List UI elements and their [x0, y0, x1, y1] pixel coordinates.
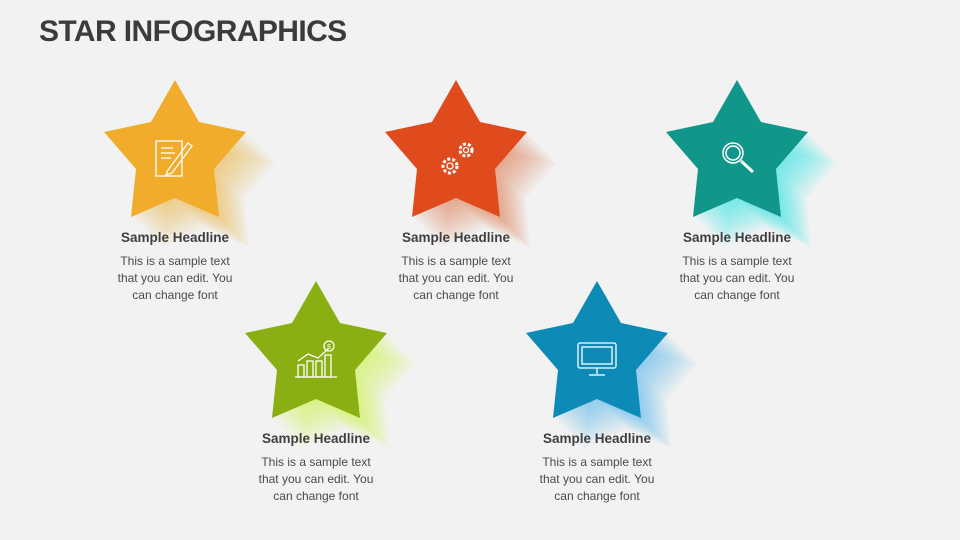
text block 1: [118, 230, 232, 302]
text block 2: This is a sample text: [401, 254, 511, 268]
text block 2: [398, 230, 513, 302]
text block 1: This is a sample text: [120, 254, 230, 268]
text block 2: can change font: [413, 288, 499, 302]
star 1: orange, document icon: [104, 80, 276, 247]
text block 4: Sample Headline: [262, 431, 370, 446]
star 5: blue, monitor icon: [526, 281, 698, 448]
text block 5: Sample Headline: [543, 431, 651, 446]
text block 1: can change font: [132, 288, 218, 302]
text block 3: [680, 230, 794, 302]
text block 1: Sample Headline: [121, 230, 229, 245]
text block 5: This is a sample text: [542, 455, 652, 469]
text block 4: can change font: [273, 489, 359, 503]
text block 2: that you can edit. You: [399, 271, 513, 285]
star 4: green, chart icon: [245, 281, 417, 448]
title: STAR INFOGRAPHICS: [39, 15, 347, 48]
text block 3: that you can edit. You: [680, 271, 794, 285]
text block 4: This is a sample text: [261, 455, 371, 469]
text block 3: Sample Headline: [683, 230, 791, 245]
text block 5: [540, 431, 654, 503]
text block 3: This is a sample text: [682, 254, 792, 268]
star 3: teal, magnifier icon: [666, 80, 838, 247]
text block 5: can change font: [554, 489, 640, 503]
text block 4: that you can edit. You: [259, 472, 373, 486]
text block 3: can change font: [694, 288, 780, 302]
text block 1: that you can edit. You: [118, 271, 232, 285]
star 4: green, chart icon: $: [327, 344, 331, 351]
text block 2: Sample Headline: [402, 230, 510, 245]
text block 5: that you can edit. You: [540, 472, 654, 486]
text block 4: [258, 431, 373, 503]
star 2: red, gears icon: [385, 80, 557, 247]
